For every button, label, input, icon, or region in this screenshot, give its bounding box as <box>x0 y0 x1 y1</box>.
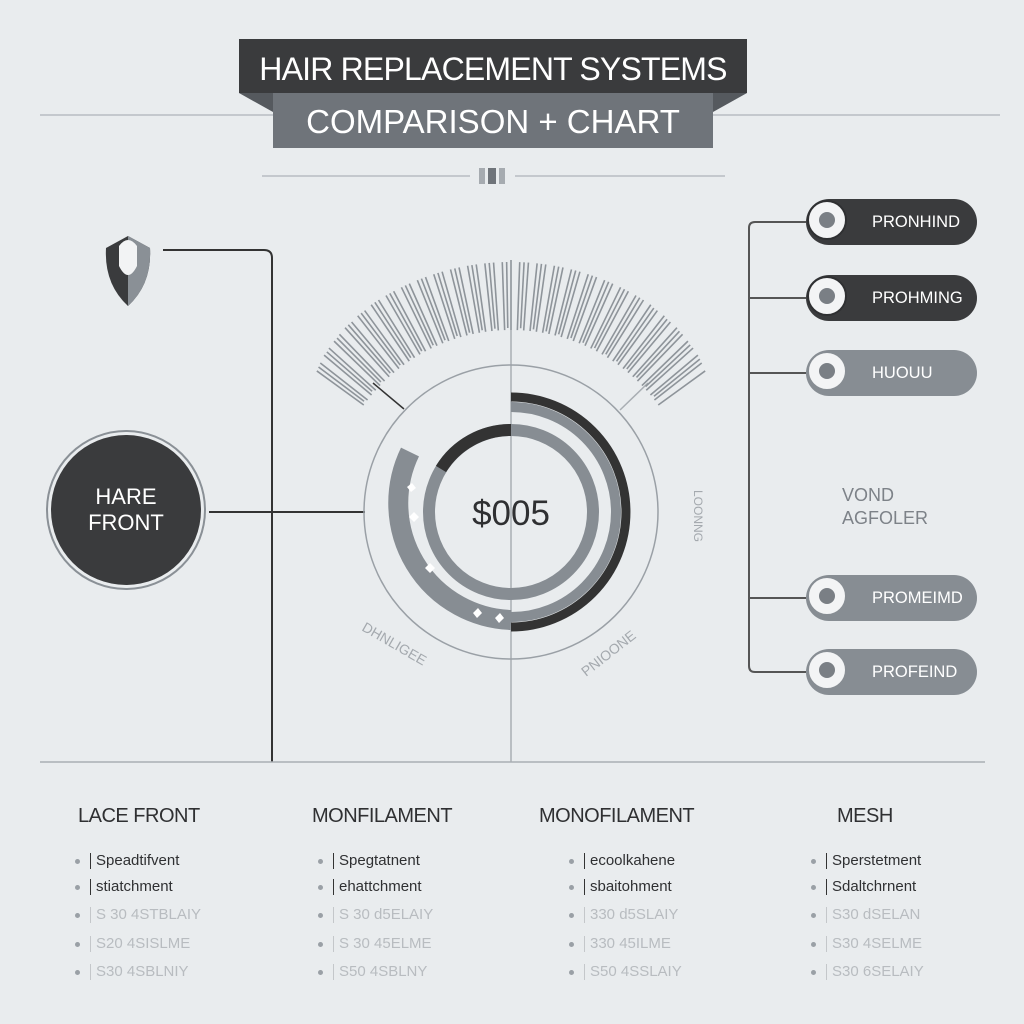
column: lace front: stiatchment <box>96 878 173 895</box>
pill 2: PROHMING <box>872 289 963 307</box>
column: mesh: S30 4SELME <box>832 935 922 952</box>
column: mesh <box>811 805 924 980</box>
column: mesh: S30 6SELAIY <box>832 963 924 980</box>
column: lace front: Speadtifvent <box>96 852 179 869</box>
side label: VOND <box>842 485 894 505</box>
column: monofilament: 330 d5SLAIY <box>590 906 678 923</box>
column: lace front: S 30 4STBLAIY <box>96 906 201 923</box>
center radial chart: PNIOONE <box>578 627 639 679</box>
pill 5 <box>806 649 977 695</box>
circle: hare front <box>46 430 206 590</box>
column: monfilament: S50 4SBLNY <box>339 963 427 980</box>
side label: AGFOLER <box>842 508 928 528</box>
center radial chart: $005 <box>472 494 550 533</box>
divider icon <box>479 168 505 184</box>
column: lace front: LACE FRONT <box>78 805 200 827</box>
column: monfilament: MONFILAMENT <box>312 805 452 827</box>
pill 3: HUOUU <box>872 364 932 382</box>
column: lace front: S20 4SISLME <box>96 935 190 952</box>
pill 1 <box>806 199 977 245</box>
title line 2 <box>273 93 713 148</box>
title line 1 <box>239 39 747 93</box>
pill 2 <box>806 275 977 321</box>
side label <box>842 485 928 528</box>
column: monofilament: ecoolkahene <box>590 852 675 869</box>
column: mesh: MESH <box>837 805 893 827</box>
pill 1: PRONHIND <box>872 213 960 231</box>
column: lace front <box>75 805 201 980</box>
center radial chart <box>316 260 706 679</box>
column: mesh: S30 dSELAN <box>832 906 920 923</box>
center radial chart: DHNLIGEE <box>360 619 429 668</box>
column: mesh: Sperstetment <box>832 852 921 869</box>
icon: hair shield <box>106 236 150 306</box>
circle: hare front: FRONT <box>88 510 164 535</box>
fringe ticks <box>317 260 705 405</box>
pill 3 <box>806 350 977 396</box>
column: monfilament: ehattchment <box>339 878 422 895</box>
title line 1: HAIR REPLACEMENT SYSTEMS <box>259 51 727 87</box>
column: monofilament: MONOFILAMENT <box>539 805 694 827</box>
column: monfilament <box>312 805 452 980</box>
column: monofilament: 330 45ILME <box>590 935 671 952</box>
column: monofilament <box>539 805 694 980</box>
center radial chart: LOONNG <box>691 490 705 542</box>
column: lace front: S30 4SBLNIY <box>96 963 189 980</box>
column: monofilament: sbaitohment <box>590 878 672 895</box>
column: mesh: Sdaltchrnent <box>832 878 916 895</box>
column: monfilament: S 30 d5ELAIY <box>339 906 433 923</box>
column: monfilament: S 30 45ELME <box>339 935 432 952</box>
title line 2: COMPARISON + CHART <box>306 103 680 140</box>
pill 5: PROFEIND <box>872 663 957 681</box>
circle: hare front: HARE <box>95 484 157 509</box>
column: monofilament: S50 4SSLAIY <box>590 963 682 980</box>
column: monfilament: Spegtatnent <box>339 852 420 869</box>
pill 4 <box>806 575 977 621</box>
right pills <box>806 199 977 695</box>
pill 4: PROMEIMD <box>872 589 963 607</box>
title banner <box>239 39 747 148</box>
